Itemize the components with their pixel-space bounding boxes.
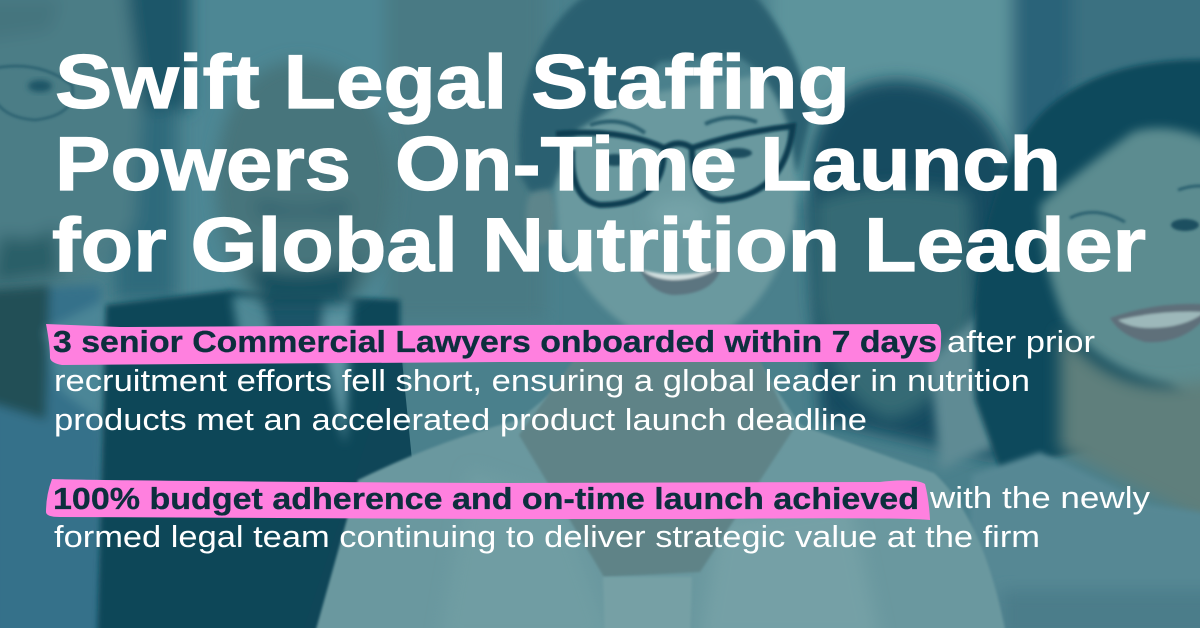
title line 1: Swift Legal Staffing <box>55 40 850 125</box>
highlight stroke 2 <box>46 479 930 520</box>
paragraph 1 <box>46 324 1095 437</box>
left man <box>0 0 190 628</box>
left man eye <box>28 80 52 92</box>
left man shirt <box>0 285 105 628</box>
face <box>550 70 795 345</box>
body line 1 end: after prior <box>947 324 1095 359</box>
title line 2 part 2: On-Time Launch <box>395 122 1061 207</box>
eyebrows <box>590 117 757 133</box>
title line 2 part 1: Powers <box>55 122 351 207</box>
right background woman <box>808 80 1015 470</box>
ear <box>526 185 556 245</box>
hair <box>519 0 812 192</box>
smile <box>1110 304 1200 342</box>
suit <box>97 290 400 628</box>
central woman head <box>519 0 812 345</box>
background wall tones <box>185 0 1200 320</box>
eyes <box>1070 186 1200 231</box>
second man <box>97 60 430 628</box>
body line 3: products met an accelerated product launch deadline <box>54 402 867 437</box>
bold statement 1: 3 senior Commercial Lawyers onboarded within 7 days <box>53 324 937 359</box>
neck and chest <box>519 350 793 577</box>
paragraph 2 <box>46 479 1151 554</box>
nose <box>650 197 710 233</box>
title line 3: for Global Nutrition Leader <box>52 203 1146 288</box>
body line 4 end: with the newly <box>929 480 1151 515</box>
highlight stroke 1 <box>46 324 941 365</box>
bold statement 2: 100% budget adherence and on-time launch achieved <box>53 481 919 516</box>
body line 5: formed legal team continuing to deliver strategic value at the firm <box>54 519 1040 554</box>
smile <box>640 265 722 295</box>
eyes <box>601 148 752 166</box>
left man glasses <box>0 66 73 120</box>
body line 2: recruitment efforts fell short, ensuring a global leader in nutrition <box>54 363 1030 398</box>
glasses <box>556 126 793 205</box>
central woman body <box>313 350 1007 628</box>
title <box>52 40 1146 288</box>
shirt collar and tie <box>232 296 352 445</box>
sweater <box>965 452 1200 628</box>
blouse fold <box>603 577 692 628</box>
far right woman <box>965 60 1200 628</box>
head <box>215 60 395 305</box>
